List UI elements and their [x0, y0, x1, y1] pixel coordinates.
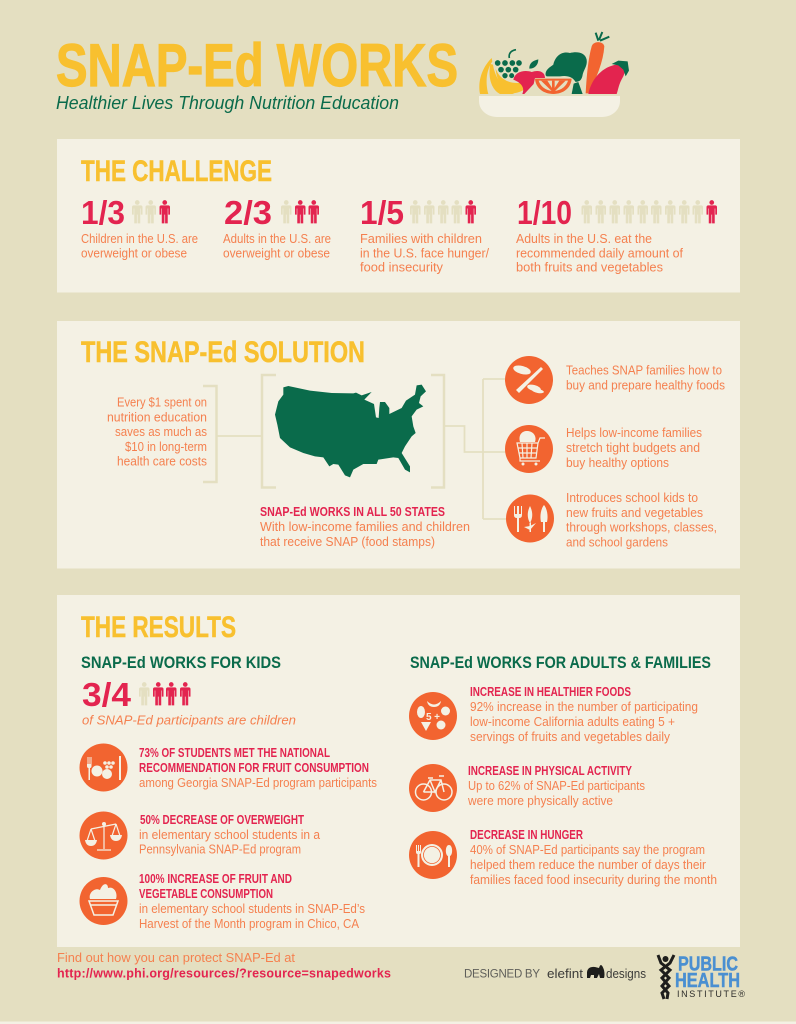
title: SNAP-Ed WORKS [56, 32, 458, 99]
heading: the results: THE RESULTS [81, 611, 236, 644]
stat: one in three children [81, 194, 198, 260]
text: savings statement [107, 394, 207, 468]
text: hunger: DECREASE IN HUNGER [470, 828, 583, 842]
logo: Public Health Institute: INSTITUTE® [677, 989, 745, 999]
icon: bicycle [409, 764, 457, 812]
stat: one in three children: 1/3 [81, 194, 125, 231]
heading: works for adults and families: SNAP-Ed WORKS FOR ADULTS & FAMILIES [410, 654, 711, 672]
text: hunger: 40% of SNAP-Ed participants say the program [470, 842, 705, 857]
text: hunger: families faced food insecurity during the month [470, 872, 717, 887]
stat: three in four participants: of SNAP-Ed participants are children [82, 712, 296, 728]
stat: two in three adults: overweight or obese [223, 246, 330, 260]
footer: call to action [57, 950, 391, 980]
footer: designer credit: elefint [547, 967, 584, 981]
text: savings statement: saves as much as [115, 424, 207, 439]
heading: the challenge: THE CHALLENGE [81, 155, 272, 188]
text: 100 percent: VEGETABLE CONSUMPTION [139, 887, 273, 901]
map: United States [275, 385, 426, 477]
stat: one in five families: in the U.S. face hunger/ [360, 246, 489, 260]
text: works in all 50 states [260, 505, 470, 549]
stat: one in ten adults: recommended daily amount of [516, 246, 683, 260]
text: healthier foods: servings of fruits and vegetables daily [470, 729, 670, 744]
text: teaches families [566, 362, 725, 392]
text: 73 percent [139, 746, 377, 790]
text: savings statement: $10 in long-term [125, 439, 207, 454]
text: works in all 50 states: SNAP-Ed WORKS IN ALL 50 STATES [260, 505, 445, 519]
stat: one in five families: Families with children [360, 231, 482, 246]
text: 73 percent: RECOMMENDATION FOR FRUIT CONSUMPTION [139, 761, 369, 775]
subtitle: Healthier Lives Through Nutrition Education [56, 93, 399, 113]
text: physical activity [467, 764, 645, 808]
stat: one in five families: food insecurity [360, 260, 443, 274]
heading: the solution: THE SNAP-Ed SOLUTION [81, 336, 365, 369]
icon: balance scale [80, 812, 128, 860]
text: healthier foods: INCREASE IN HEALTHIER FOODS [470, 685, 631, 699]
icon: shopping cart [505, 425, 553, 473]
footer: designer credit [464, 965, 646, 981]
footer: call to action: http://www.phi.org/resources/?resource=snapedworks [57, 966, 391, 980]
stat: one in ten adults: both fruits and vegetables [516, 260, 663, 274]
text: introduces school kids: through workshops, classes, [566, 520, 717, 534]
text: physical activity: INCREASE IN PHYSICAL ACTIVITY [468, 764, 633, 778]
text: physical activity: were more physically active [467, 793, 613, 808]
text: introduces school kids [566, 490, 717, 550]
text: helps families: Helps low-income families [566, 425, 702, 440]
logo: Public Health Institute [658, 952, 745, 999]
text: 50 percent [139, 813, 321, 856]
stat: one in three children: Children in the U.S. are [81, 231, 198, 246]
text: physical activity: Up to 62% of SNAP-Ed participants [468, 778, 645, 793]
text: 50 percent: 50% DECREASE OF OVERWEIGHT [140, 813, 304, 827]
text: 73 percent: among Georgia SNAP-Ed program participants [139, 775, 377, 790]
text: 50 percent: in elementary school students in a [139, 827, 321, 842]
text: healthier foods: low-income California adults eating 5 + [470, 714, 675, 729]
stat: one in five families [360, 194, 489, 274]
stat: one in five families: 1/5 [360, 194, 404, 231]
text: helps families: stretch tight budgets and [566, 440, 700, 455]
stat: three in four participants: 3/4 [82, 676, 132, 713]
icon: plate and cutlery [409, 831, 457, 879]
text: teaches families: buy and prepare healthy foods [566, 378, 725, 392]
text: 100 percent: Harvest of the Month program in Chico, CA [139, 916, 359, 931]
text: savings statement: health care costs [117, 454, 207, 468]
stat: two in three adults [223, 194, 331, 260]
panel: the challenge [57, 139, 740, 292]
icon: plate of fruit [80, 744, 128, 792]
icon: garden tools [506, 494, 554, 542]
text: savings statement: nutrition education [107, 410, 207, 424]
stat: one in ten adults: Adults in the U.S. eat the [516, 231, 652, 246]
text: 73 percent: 73% OF STUDENTS MET THE NATIONAL [139, 746, 330, 760]
text: introduces school kids: new fruits and vegetables [566, 505, 703, 520]
logo: Public Health Institute: HEALTH [675, 969, 740, 992]
text: healthier foods: 92% increase in the number of participating [470, 699, 698, 714]
stat: one in ten adults: 1/10 [517, 194, 572, 231]
text: hunger [470, 828, 717, 887]
stat: two in three adults: Adults in the U.S. are [223, 231, 331, 246]
icon: five plus servings: 5+ [426, 712, 440, 723]
text: works in all 50 states: With low-income families and children [260, 519, 470, 534]
text: teaches families: Teaches SNAP families how to [566, 362, 722, 378]
stat: three in four participants [82, 676, 296, 728]
stat: one in ten adults [516, 194, 717, 274]
stat: two in three adults: 2/3 [224, 194, 272, 231]
footer: designer credit: DESIGNED BY [464, 968, 540, 980]
text: 100 percent [139, 872, 365, 931]
text: hunger: helped them reduce the number of days their [470, 857, 707, 872]
heading: works for kids: SNAP-Ed WORKS FOR KIDS [81, 654, 281, 672]
text: 50 percent: Pennsylvania SNAP-Ed program [139, 842, 301, 856]
icon: basket of vegetables [80, 877, 128, 925]
text: 100 percent: 100% INCREASE OF FRUIT AND [139, 872, 292, 886]
text: introduces school kids: and school gardens [566, 534, 668, 550]
footer: call to action: Find out how you can protect SNAP-Ed at [57, 950, 295, 965]
text: introduces school kids: Introduces school kids to [566, 490, 698, 505]
stat: one in three children: overweight or obese [81, 246, 187, 260]
icon: cutting board and food [505, 356, 553, 404]
panel: the results [57, 595, 740, 947]
text: 100 percent: in elementary school students in SNAP-Ed’s [139, 901, 365, 916]
icon: five plus servings [409, 692, 457, 740]
text: helps families: buy healthy options [566, 455, 669, 470]
text: helps families [566, 425, 702, 470]
logo: Public Health Institute: PUBLIC [678, 952, 738, 976]
panel: the solution [57, 321, 740, 568]
footer: designer credit: designs [606, 967, 646, 981]
text: healthier foods [470, 685, 698, 744]
text: works in all 50 states: that receive SNAP (food stamps) [260, 534, 435, 549]
text: savings statement: Every $1 spent on [117, 394, 207, 410]
icon: fruit bowl [479, 32, 629, 117]
